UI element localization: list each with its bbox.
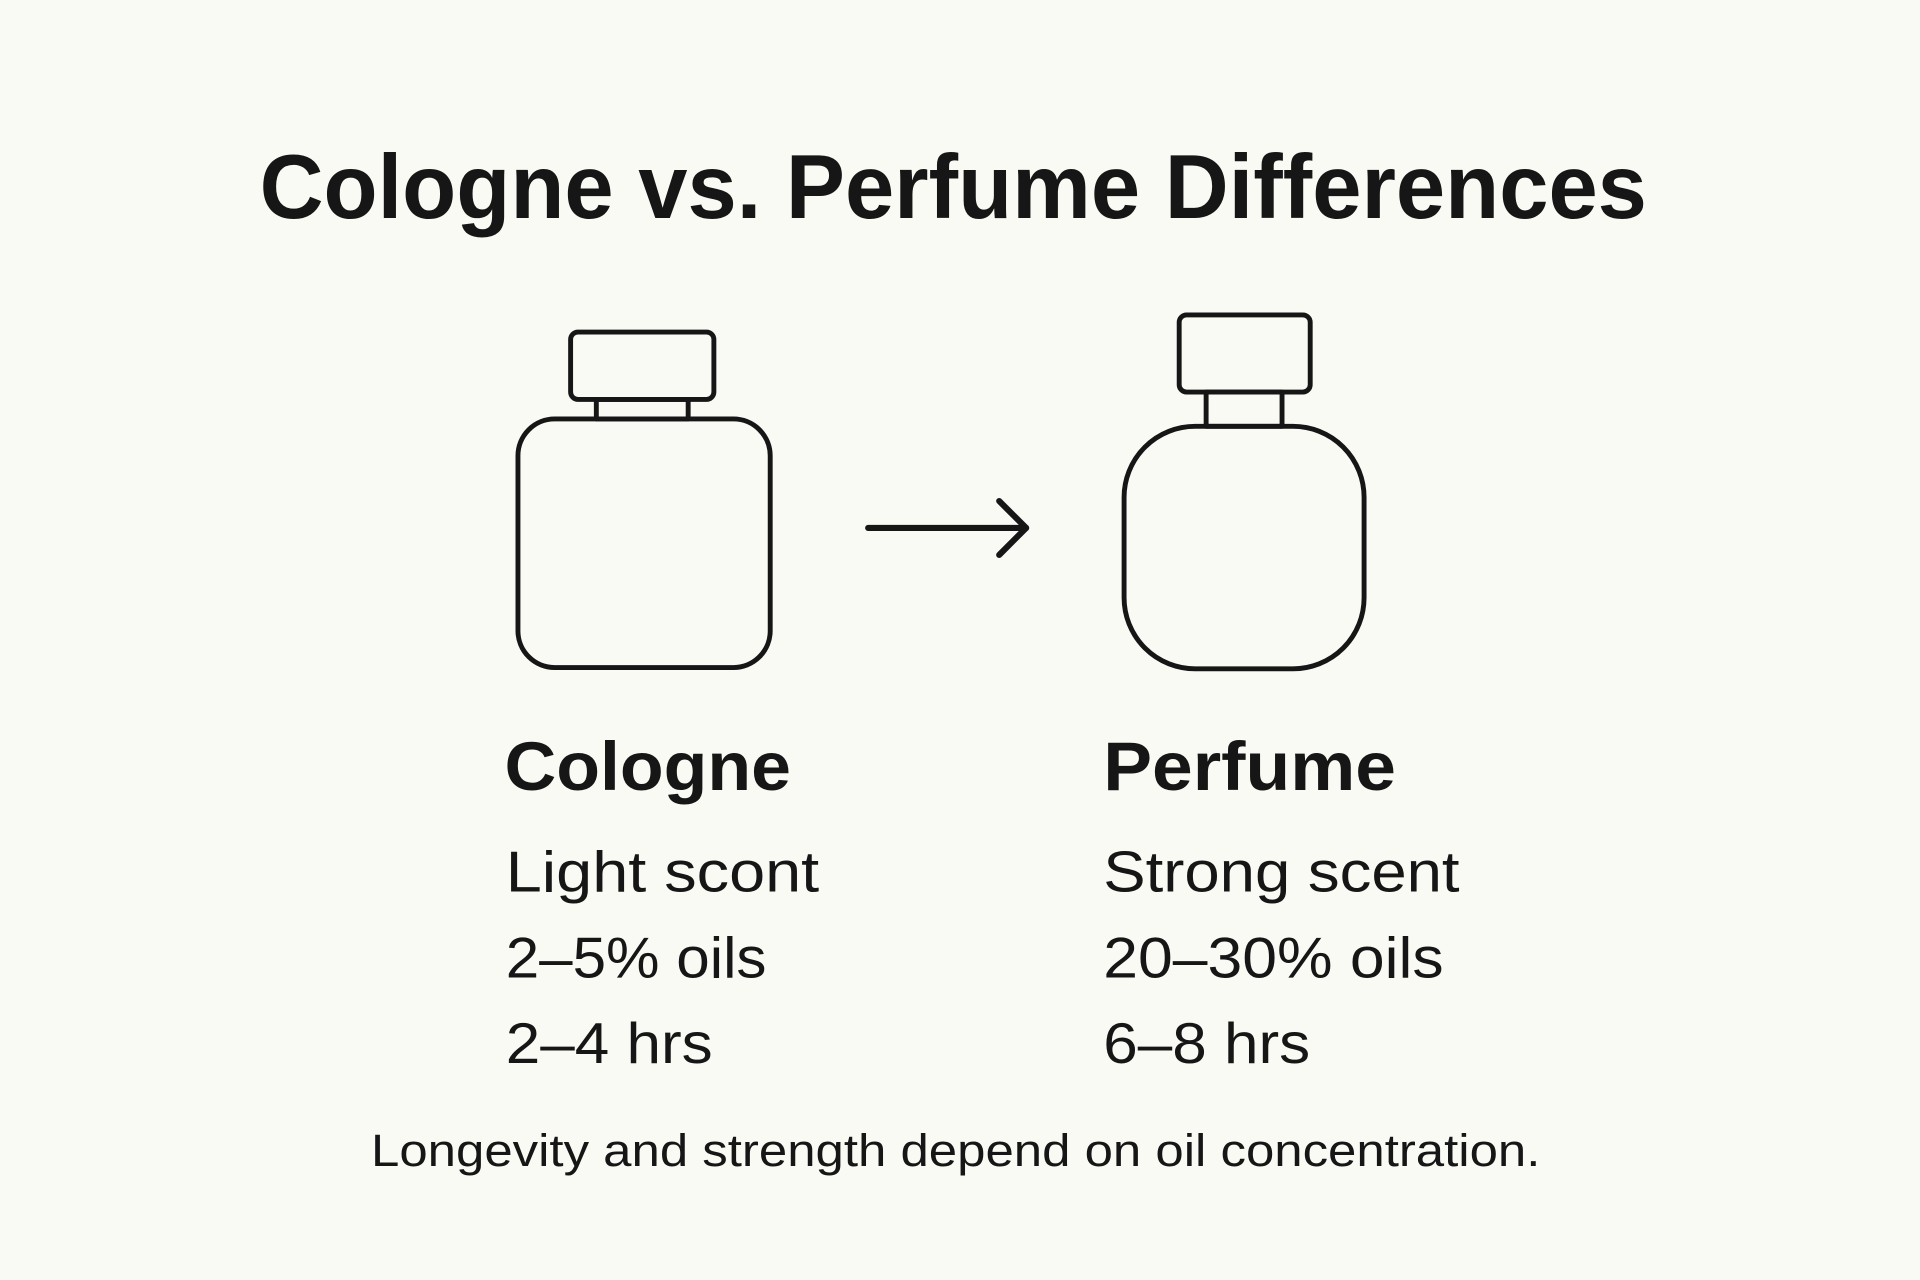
panel: perfume	[1103, 728, 1460, 1076]
footer note: Longevity and strength depend on oil concentration.	[371, 1125, 1540, 1176]
panel: cologne: 2–4 hrs	[506, 1012, 713, 1076]
arrow	[868, 501, 1026, 555]
panel: cologne: Light scont	[506, 841, 819, 905]
panel: perfume: Strong scent	[1103, 841, 1460, 905]
panel: perfume: 6–8 hrs	[1103, 1012, 1310, 1076]
icon: cologne bottle	[518, 332, 770, 668]
panel: cologne	[504, 728, 819, 1076]
panel: perfume: 20–30% oils	[1103, 926, 1444, 990]
title: Cologne vs. Perfume Differences	[260, 137, 1647, 238]
panel: perfume: Perfume	[1103, 728, 1396, 805]
panel: cologne: 2–5% oils	[506, 926, 767, 990]
panel: cologne: Cologne	[504, 728, 791, 805]
icon: perfume bottle	[1124, 315, 1364, 669]
